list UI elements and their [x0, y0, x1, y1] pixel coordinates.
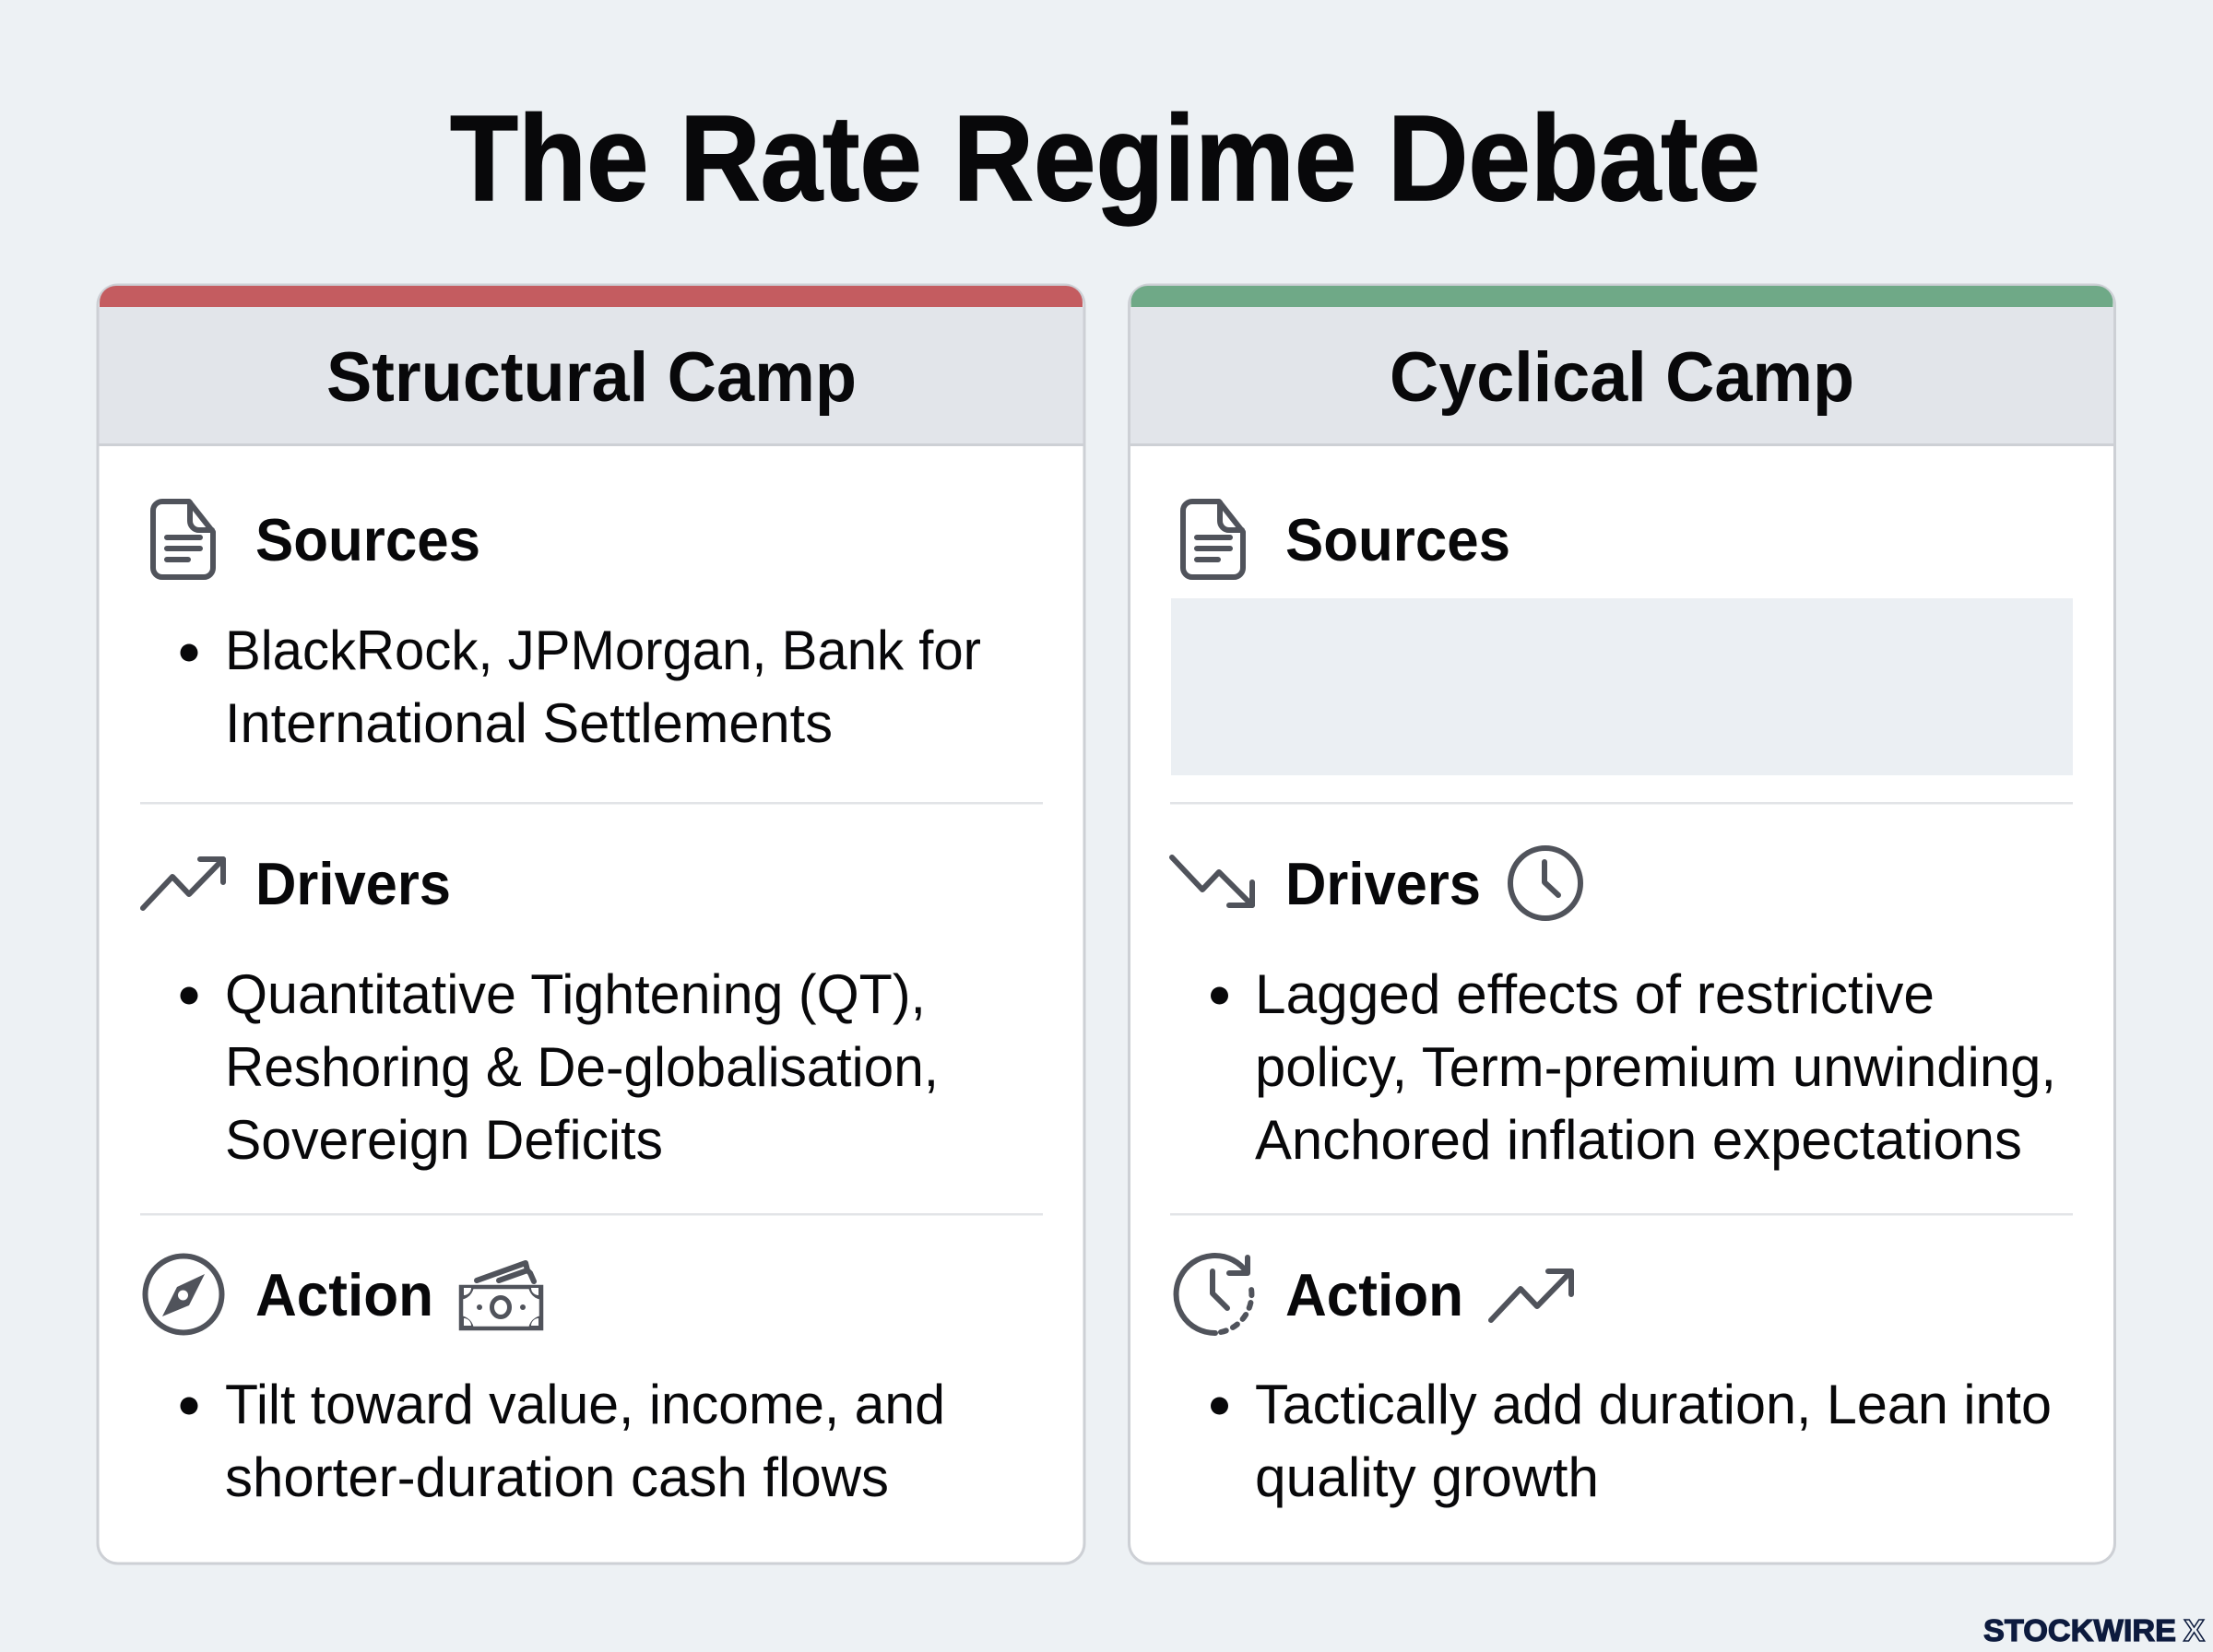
red accent bar [100, 286, 1083, 307]
bullet: action [181, 1374, 945, 1508]
card header band [100, 307, 1083, 444]
bullet: sources: International Settlements [225, 692, 833, 754]
green accent bar [1130, 286, 2113, 307]
empty sources placeholder [1171, 598, 2073, 775]
heading: structural camp: Structural Camp [326, 338, 857, 417]
icon: trend up [143, 859, 223, 908]
bullet: action [1211, 1374, 2052, 1508]
panel: cyclical camp [1129, 285, 2115, 1564]
heading: action: Action [255, 1261, 433, 1328]
icon: cash [459, 1263, 543, 1330]
bullet: sources [181, 620, 981, 754]
header rule [99, 443, 1083, 446]
card background [98, 285, 1084, 1564]
header rule [1130, 443, 2113, 446]
heading: action: Action [1285, 1261, 1463, 1328]
logo: stockwire x: STOCKWIRE [1983, 1613, 2176, 1647]
card header band [1130, 307, 2113, 444]
bullet: drivers: Reshoring & De-globalisation, [225, 1036, 939, 1098]
icon: compass [146, 1256, 221, 1333]
bullet: drivers: Quantitative Tightening (QT), [225, 963, 926, 1025]
icon: trend up [1491, 1271, 1571, 1320]
bullet: action: Tactically add duration, Lean into [1255, 1374, 2052, 1435]
icon: document [1183, 502, 1243, 577]
bullet: drivers: Anchored inflation expectations [1255, 1109, 2022, 1171]
bullet: sources: BlackRock, JPMorgan, Bank for [225, 620, 981, 681]
bullet: drivers: Sovereign Deficits [225, 1109, 663, 1171]
icon: trend down [1172, 857, 1252, 905]
bullet: drivers: policy, Term-premium unwinding, [1255, 1036, 2056, 1098]
bullet: drivers [181, 963, 939, 1171]
bullet: drivers: Lagged effects of restrictive [1255, 963, 1935, 1025]
bullet: action: Tilt toward value, income, and [225, 1374, 945, 1435]
heading: sources: Sources [255, 506, 480, 573]
heading: sources: Sources [1285, 506, 1510, 573]
heading: drivers: Drivers [255, 850, 451, 917]
heading: cyclical camp: Cyclical Camp [1390, 338, 1854, 417]
heading: drivers: Drivers [1285, 850, 1481, 917]
logo: stockwire x: X [2183, 1613, 2205, 1647]
bullet: action: shorter-duration cash flows [225, 1446, 889, 1508]
icon: document [153, 502, 213, 577]
icon: clock [1510, 848, 1580, 918]
panel: structural camp [98, 285, 1084, 1564]
bullet: action: quality growth [1255, 1446, 1599, 1508]
icon: clock with arrow [1177, 1256, 1251, 1333]
card background [1129, 285, 2115, 1564]
bullet: drivers [1211, 963, 2056, 1171]
title: The Rate Regime Debate [450, 90, 1760, 226]
